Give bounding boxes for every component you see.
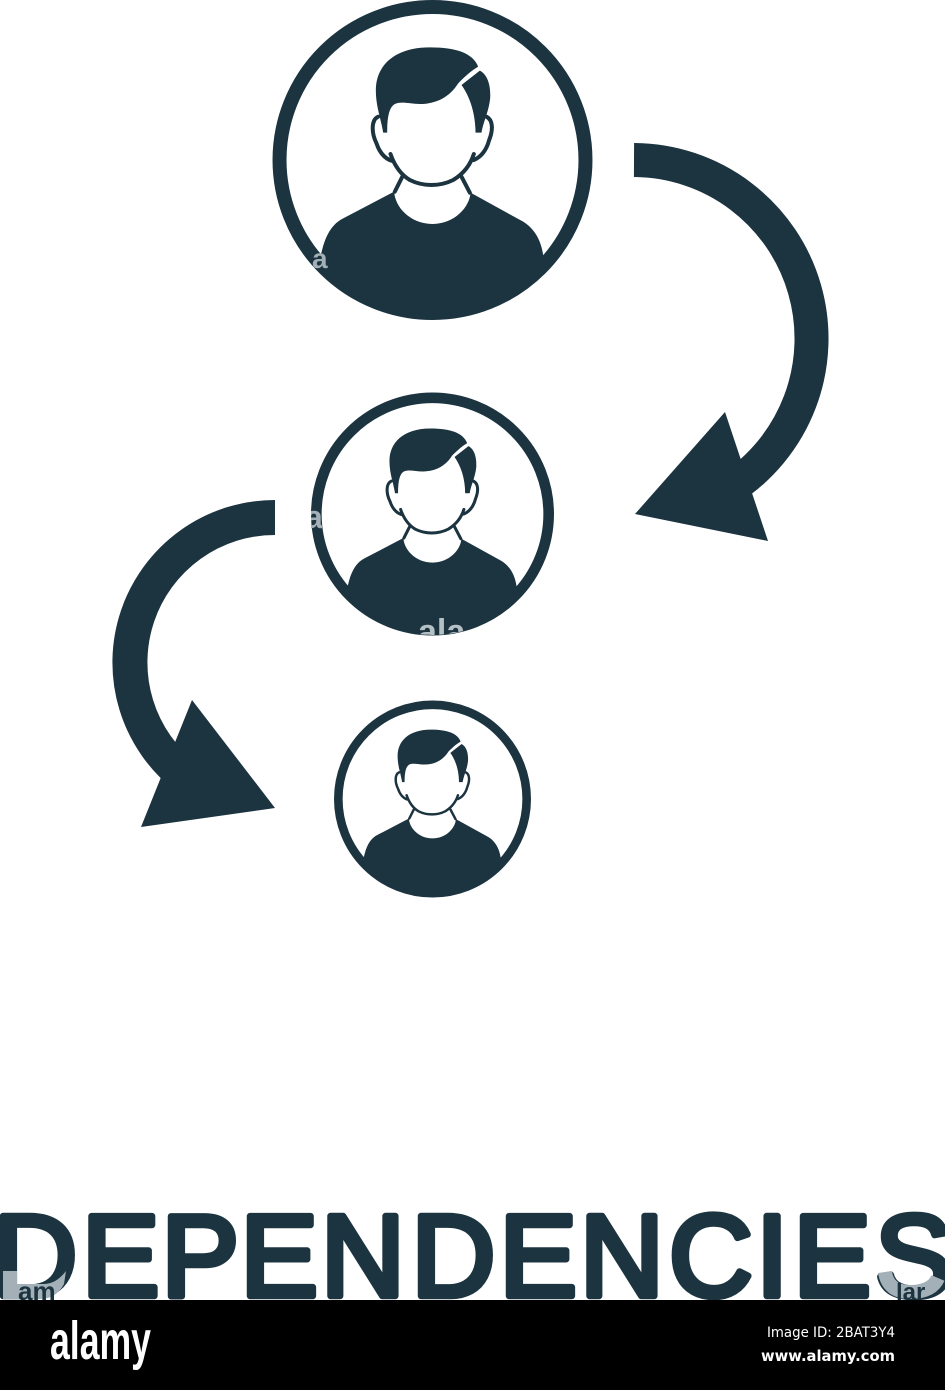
title: DEPENDENCIES [0, 1191, 945, 1321]
watermark over title: am [18, 1276, 56, 1306]
watermark over title: lar [896, 1279, 925, 1306]
watermark fragments: a [305, 499, 323, 535]
watermark over title [3, 1271, 938, 1306]
arrow: top person to middle person [634, 160, 812, 541]
watermark fragments: a [312, 243, 328, 274]
icon: large person in circle [280, 7, 585, 315]
arrow: middle person to bottom person [130, 518, 275, 827]
icon: medium person in circle [316, 398, 549, 631]
image id: Image ID: 2BAT3Y4 [767, 1325, 895, 1341]
watermark fragments: ala [418, 613, 466, 651]
icon: small person in circle [338, 705, 527, 894]
watermark fragments [311, 253, 463, 635]
footer logo: alamy [50, 1311, 151, 1371]
website: www.alamy.com [761, 1347, 895, 1365]
footer bar [0, 1300, 945, 1390]
